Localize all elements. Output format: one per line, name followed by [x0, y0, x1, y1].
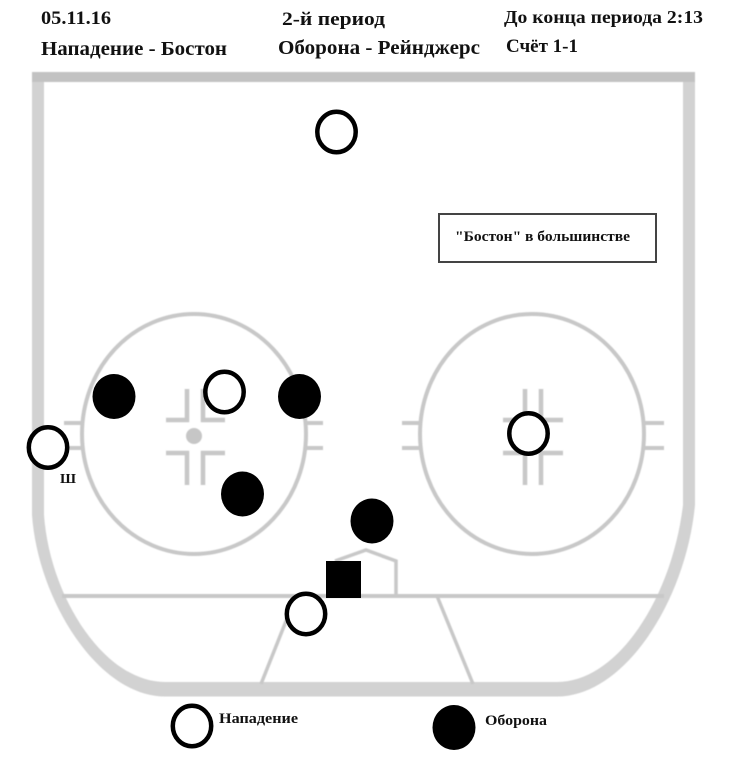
- left faceoff dot: [186, 428, 202, 444]
- left circle hash marks: [64, 423, 323, 448]
- header: date: 05.11.16: [41, 8, 111, 29]
- legend: defense: [432, 705, 548, 750]
- legend: attack: [173, 706, 299, 746]
- goal line: [62, 594, 664, 598]
- header: attacking team: Нападение - Бостон: [41, 38, 227, 60]
- header: time left: До конца периода 2:13: [504, 7, 703, 27]
- header: score: Счёт 1-1: [506, 36, 578, 57]
- defender players: [92, 374, 394, 544]
- left faceoff cross: [166, 389, 225, 485]
- goalie square: [326, 561, 361, 598]
- legend: attack: Нападение: [219, 711, 299, 727]
- callout: power play: "Бостон" в большинстве: [455, 229, 630, 245]
- rink boards: [32, 72, 695, 696]
- right circle hash marks: [402, 423, 664, 448]
- hockey rink: [32, 72, 695, 696]
- trapezoid left line: [261, 596, 296, 684]
- right faceoff circle: [420, 314, 644, 554]
- callout: power play: [439, 214, 656, 262]
- trapezoid right line: [437, 596, 473, 684]
- shooter label: Ш: [60, 472, 77, 487]
- header: period: 2-й период: [282, 9, 385, 30]
- attacker players: [29, 112, 548, 634]
- left faceoff circle: [82, 314, 306, 554]
- rink top edge: [32, 72, 695, 82]
- legend: defense: Оборона: [485, 713, 548, 729]
- right faceoff cross: [503, 389, 563, 485]
- header: defending team: Оборона - Рейнджерс: [278, 37, 480, 59]
- goal crease: [335, 550, 396, 596]
